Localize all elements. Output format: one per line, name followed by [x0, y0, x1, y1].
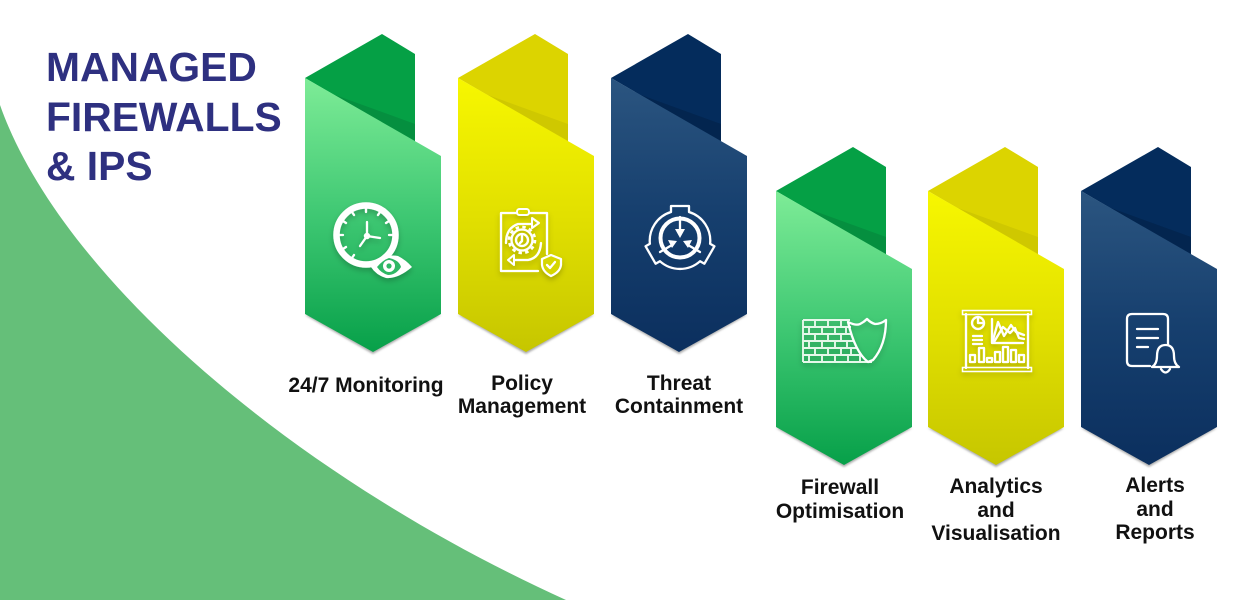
title: MANAGED — [46, 44, 257, 90]
title — [46, 44, 282, 189]
icon: brick wall with shield — [803, 319, 886, 362]
label: Threat Containment: Containment — [615, 395, 743, 418]
card: Threat Containment — [611, 34, 747, 354]
label: Firewall Optimisation — [776, 476, 904, 523]
card: Firewall Optimisation — [776, 147, 912, 467]
card: Policy Management — [458, 34, 594, 354]
background green curve — [0, 105, 566, 600]
icon: containment symbol — [646, 206, 714, 269]
title: & IPS — [46, 143, 153, 189]
label: Analytics and Visualisation: and — [977, 499, 1015, 522]
label: Analytics and Visualisation: Visualisation — [931, 522, 1061, 545]
label: Alerts and Reports: and — [1136, 498, 1174, 521]
label: Threat Containment: Threat — [647, 372, 711, 395]
label: Alerts and Reports — [1115, 474, 1195, 544]
label: Threat Containment — [615, 372, 743, 418]
label: 24/7 Monitoring: 24/7 Monitoring — [288, 374, 444, 397]
label: Policy Management — [458, 372, 586, 418]
label: Policy Management: Policy — [491, 372, 553, 395]
label: Firewall Optimisation: Optimisation — [776, 500, 904, 523]
card: Alerts and Reports — [1081, 147, 1217, 467]
icon: analytics board — [962, 310, 1032, 372]
label: Alerts and Reports: Reports — [1115, 521, 1195, 544]
icon: clipboard with gear and shield — [501, 209, 561, 276]
card: Analytics and Visualisation — [928, 147, 1064, 467]
label: Analytics and Visualisation — [931, 475, 1061, 545]
card: 24/7 Monitoring — [305, 34, 441, 354]
label: Policy Management: Management — [458, 395, 586, 418]
title: FIREWALLS — [46, 94, 282, 140]
label: Alerts and Reports: Alerts — [1125, 474, 1185, 497]
label: Firewall Optimisation: Firewall — [801, 476, 879, 499]
icon: report with bell — [1127, 314, 1179, 372]
label: Analytics and Visualisation: Analytics — [949, 475, 1043, 498]
icon: clock with eye — [336, 206, 412, 278]
